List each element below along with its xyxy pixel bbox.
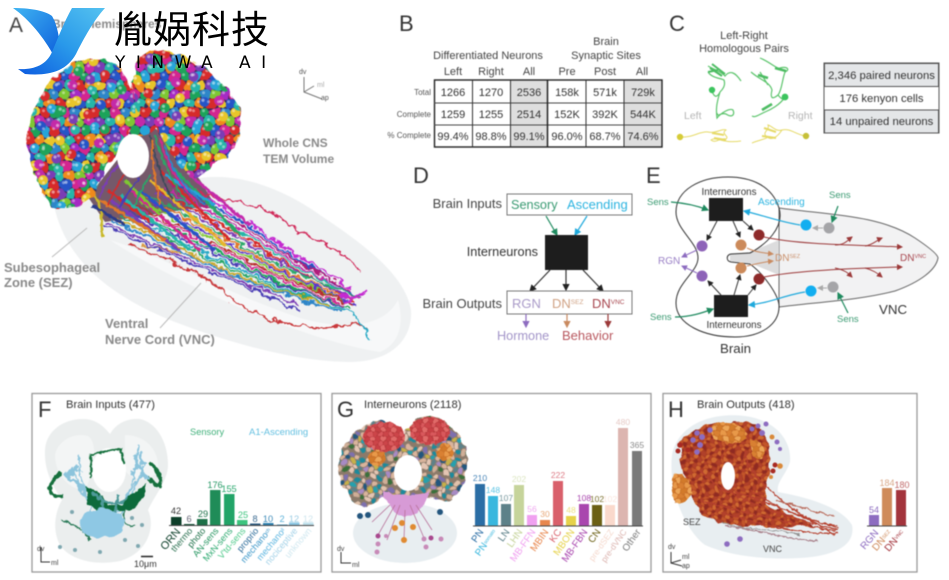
G bar values: 222 [551, 470, 565, 480]
table values: 98.8% [475, 131, 507, 143]
H bar labels: RGN [859, 528, 881, 552]
brain outputs box: DN [592, 296, 611, 311]
neuron tracts [105, 180, 371, 342]
brain inputs label: Brain Inputs [433, 196, 502, 211]
panel F: brain inputs [32, 394, 321, 572]
panel letter C: C [669, 11, 685, 36]
H tracts to VNC [700, 450, 838, 541]
table values: 729k [631, 87, 655, 99]
paired neurons counts box: 2,346 paired neurons [828, 70, 935, 82]
F bar values: 6 [186, 514, 192, 524]
F bar labels: ll [280, 527, 286, 533]
table headers: Pre [558, 66, 576, 78]
table values: 2536 [517, 87, 541, 99]
G axis: ml [352, 562, 360, 569]
panel G frame [332, 394, 651, 572]
panel letter G: G [337, 397, 354, 422]
circuit labels: Sens [647, 197, 669, 208]
table headers: Brain [593, 36, 619, 48]
F bar values: 12 [289, 514, 299, 524]
H bar labels: SEZ [881, 529, 892, 540]
panel G title: Interneurons (2118) [364, 399, 462, 411]
F bar labels: AN-sens [191, 525, 221, 559]
G red clusters [363, 417, 450, 452]
G orange clusters [368, 443, 453, 466]
right brain lobe spheres [133, 50, 241, 178]
table values: 544K [630, 109, 657, 121]
G bar values: 365 [630, 440, 644, 450]
G bar values: 108 [577, 493, 591, 503]
F bar labels: ORN [158, 526, 183, 553]
table headers: Differentiated Neurons [433, 50, 543, 62]
table row labels [387, 88, 432, 140]
panel D: information flow schematic [413, 163, 632, 343]
SEZ shaded region [730, 240, 779, 275]
G hole [394, 455, 422, 491]
brain outputs box: DN [552, 296, 571, 311]
top interneurons label: Interneurons [701, 187, 757, 198]
label: subesophageal zone with leader: Zone (SEZ) [4, 275, 73, 290]
H bar values: 184 [879, 478, 895, 488]
label: whole CNS TEM volume: TEM Volume [263, 152, 334, 166]
tract dark root [88, 125, 215, 222]
F bar values: 155 [221, 484, 237, 494]
inner volume highlight [110, 240, 401, 352]
left brain lobe spheres [27, 59, 135, 208]
label: left: Left [684, 110, 702, 122]
sphere bridge above hole [121, 110, 157, 136]
F teal strands over mass [92, 492, 128, 512]
axis: dv ml ap [299, 69, 329, 102]
DN VNC label: DN [900, 253, 914, 264]
H VNC label: VNC [763, 544, 783, 554]
panel B: neuron and synapse table [387, 11, 662, 147]
F bar values: 42 [171, 506, 181, 516]
yellow neuron left [677, 130, 741, 142]
panel G: interneurons [332, 394, 651, 572]
circuit nodes [696, 220, 838, 296]
arrows into interneurons [546, 216, 587, 235]
table values: 96.0% [551, 131, 583, 143]
panel H title: Brain Outputs (418) [697, 399, 795, 411]
G lower volume [353, 503, 457, 563]
brain inputs box: Sensory [511, 198, 558, 212]
VNC outline [779, 208, 938, 307]
F bar values: 8 [252, 514, 258, 524]
central hole [117, 134, 149, 178]
panel A: whole CNS volume [4, 14, 411, 362]
label: ventral nerve cord with leader: Nerve Cord (VNC) [105, 332, 215, 347]
DN SEZ label: DN [775, 253, 789, 264]
table headers: All [636, 66, 648, 78]
table values: 1266 [441, 87, 465, 99]
interneurons block [545, 235, 588, 270]
G bar values: 480 [616, 417, 630, 427]
table values: 392K [592, 109, 619, 121]
yellow neuron right [752, 125, 809, 143]
paired neurons counts box: 14 unpaired neurons [830, 116, 934, 128]
F axis: dv [37, 546, 45, 553]
bottom interneurons block [714, 295, 748, 317]
interneurons label: Interneurons [467, 245, 538, 259]
H axis [668, 544, 690, 570]
DN SEZ label: SEZ [789, 254, 801, 260]
brain inputs box: Ascending [567, 197, 628, 212]
G bars [473, 428, 643, 526]
panel E: CNS circuit schematic [646, 163, 938, 356]
F bar labels: mechano [239, 530, 270, 565]
green neuron right [751, 58, 788, 117]
H neuron mass [680, 422, 815, 527]
G bar values: 210 [473, 473, 487, 483]
panel C title: Homologous Pairs [699, 43, 789, 55]
brain inputs box [507, 194, 632, 215]
hormone label: Hormone [497, 329, 549, 343]
G bar values: 102 [603, 494, 617, 504]
table headers: Synaptic Sites [571, 50, 641, 62]
table row labels: % Complete [387, 131, 432, 140]
table values: 74.6% [627, 131, 659, 143]
DN VNC label: VNC [914, 254, 926, 260]
G bar labels: MB-FBN [560, 527, 590, 564]
G descending fibers [372, 505, 432, 540]
axis: dv ml ap: ap [321, 95, 329, 102]
brain outline [676, 177, 780, 337]
table headers: Left [444, 66, 462, 78]
G brain lobes [339, 418, 467, 508]
F bars [169, 490, 314, 526]
H bar values: 54 [869, 505, 879, 515]
F bar values: 12 [303, 514, 313, 524]
H purple somata [690, 422, 782, 547]
circuit arrows [671, 202, 902, 317]
F bar values: 25 [238, 510, 248, 520]
G bar values: 148 [486, 485, 500, 495]
G bar labels: pre-dVNC [599, 527, 629, 564]
brain outputs box [507, 291, 632, 314]
G bar labels: MBIN [528, 527, 551, 554]
F green arbors [50, 449, 161, 540]
F bar labels: mechano [255, 528, 286, 562]
logo mark: Y [13, 8, 105, 74]
G bar labels: MBON [552, 527, 577, 558]
brain label: Brain [720, 341, 751, 356]
panel letter F: F [38, 397, 51, 422]
table values: 158k [555, 87, 579, 99]
G bar values: 48 [566, 505, 576, 515]
panel H: brain outputs [663, 394, 917, 572]
H bars [867, 488, 907, 526]
brain outputs box: VNC [611, 299, 625, 306]
table headers: Right [478, 66, 504, 78]
G bar labels: PN [473, 541, 490, 558]
F bar values: 10 [263, 514, 273, 524]
label: subesophageal zone with leader: Subesophageal [4, 260, 100, 275]
F bar values: 176 [207, 480, 223, 490]
F bar labels: ch [264, 527, 272, 535]
table values: 1255 [479, 109, 503, 121]
G bar labels: pre-dSEZ [587, 527, 616, 563]
legend: A1-ascending: A1-Ascending [249, 427, 308, 438]
F axis [37, 546, 59, 567]
paired neurons counts box: 176 kenyon cells [839, 93, 924, 105]
F bar labels: thermo [169, 526, 195, 554]
F axis: ml [51, 560, 59, 567]
G bar labels: PN [470, 527, 486, 545]
circuit labels: Sens [837, 314, 859, 325]
G bar labels [470, 527, 644, 564]
table values: 99.4% [437, 131, 469, 143]
brain outputs label: Brain Outputs [422, 296, 502, 311]
panel H frame [663, 394, 917, 572]
F bar labels: nociceptive [263, 526, 300, 567]
G bar labels: somato [483, 528, 497, 545]
F volume inner lobes [55, 435, 158, 490]
G bar labels: Other [620, 527, 644, 554]
G purple tract [384, 490, 430, 518]
paired neurons counts box [824, 63, 939, 133]
G bar labels: MB-FFN [508, 527, 538, 564]
panel F frame [32, 394, 321, 572]
G axis: dv [337, 546, 345, 553]
G cell bodies [357, 509, 444, 554]
F bar labels: proprio [235, 526, 261, 554]
H bar values [869, 478, 910, 515]
RGN label: RGN [658, 256, 680, 267]
G bar values: 102 [590, 494, 604, 504]
H bar values: 180 [894, 480, 910, 490]
table values: 99.1% [513, 131, 545, 143]
table row labels: Total [414, 88, 431, 97]
F bar values [171, 480, 313, 524]
ascending label: Ascending [758, 197, 805, 208]
H axis: ap [682, 563, 690, 570]
bottom interneurons label: Interneurons [706, 320, 762, 331]
table values: 1270 [479, 87, 503, 99]
G bar values: 202 [512, 474, 526, 484]
sphere highlights [27, 50, 241, 208]
F bar values: 29 [198, 509, 208, 519]
loose sphere overlay [27, 50, 241, 208]
G bar values: 30 [540, 509, 550, 519]
table shaded columns [510, 80, 662, 147]
F light blue arbors [65, 445, 148, 525]
arrows to outputs [530, 270, 603, 291]
table grid [434, 80, 662, 147]
axis: dv ml ap: dv [299, 69, 307, 76]
panel F title: Brain Inputs (477) [66, 399, 155, 411]
G bar labels: LHN [505, 527, 525, 550]
label: ventral nerve cord with leader [105, 283, 215, 347]
F bar labels: V'td-sens [216, 525, 248, 561]
table row labels: Complete [397, 110, 432, 119]
brain outputs box: SEZ [571, 299, 583, 306]
G bar values [473, 417, 644, 519]
H SEZ label: SEZ [683, 517, 701, 527]
table headers: Post [594, 66, 616, 78]
table headers [433, 36, 648, 78]
panel letter B: B [399, 11, 414, 36]
table values: 152K [554, 109, 581, 121]
logo wordmark Latin: YINWA AI [114, 53, 277, 73]
F bar labels [158, 525, 314, 567]
G bar labels: KC [548, 527, 564, 545]
table headers: All [523, 66, 535, 78]
axis: dv ml ap: ml [317, 82, 325, 89]
thick tract roots [92, 170, 250, 250]
H bar labels [859, 528, 908, 554]
G bar values: 107 [499, 493, 513, 503]
table values: 571k [593, 87, 617, 99]
H orange outliers [769, 434, 783, 479]
H dark red somata [676, 442, 778, 474]
F bar labels: photo [185, 526, 208, 550]
legend: sensory: Sensory [190, 427, 224, 437]
label: subesophageal zone with leader [4, 228, 100, 290]
table values: 1259 [441, 109, 465, 121]
H bar labels: VNC [894, 529, 905, 541]
F bar labels: unknown [283, 526, 314, 560]
H axis: ml [682, 554, 690, 561]
F scale bar: 10μm [134, 559, 157, 569]
F cell bodies [58, 510, 144, 554]
top interneurons block [709, 198, 743, 221]
panel C: homologous pairs [669, 11, 939, 143]
central tract column [100, 135, 205, 208]
F bar values: 2 [279, 514, 285, 524]
VNC label: VNC [879, 302, 907, 317]
F hole [92, 448, 126, 492]
H bar labels: DN [870, 535, 888, 553]
F volume [45, 419, 168, 563]
heading: brain hemispheres: Brain Hemispheres [52, 17, 162, 31]
G bar values: 56 [527, 504, 537, 514]
G bar labels: LN [496, 527, 512, 544]
F blue mass [79, 509, 125, 539]
behavior label: Behavior [562, 328, 614, 343]
G bar labels: CN [586, 527, 603, 545]
brain outputs box: RGN [512, 296, 541, 311]
circuit labels [647, 190, 859, 325]
label: right: Right [788, 110, 813, 122]
H volume [671, 415, 852, 558]
table values [437, 87, 659, 143]
panel letter E: E [646, 163, 661, 188]
output arrows [526, 314, 608, 327]
panel C title: Left-Right [720, 30, 768, 42]
circuit labels: Sens [650, 312, 672, 323]
G axis [337, 546, 360, 569]
label: whole CNS TEM volume: Whole CNS [263, 136, 328, 150]
H axis: dv [668, 544, 676, 551]
logo wordmark Chinese: 胤娲科技 [114, 0, 270, 54]
H hole [721, 462, 735, 490]
table values: 68.7% [589, 131, 621, 143]
VNC translucent volume [55, 173, 411, 362]
panel letter D: D [413, 163, 429, 188]
circuit labels: Sens [829, 190, 851, 201]
watermark logo [13, 0, 277, 74]
green neuron left [708, 64, 741, 118]
F bar labels: MxN-sens [201, 525, 235, 563]
F dark green mass [86, 483, 147, 512]
table values: 2514 [517, 109, 541, 121]
H orange soma cluster [672, 422, 764, 503]
H bar labels: DN [883, 536, 901, 554]
panel letter H: H [668, 397, 684, 422]
panel letter A: A [9, 14, 23, 37]
label: ventral nerve cord with leader: Ventral [105, 316, 148, 331]
